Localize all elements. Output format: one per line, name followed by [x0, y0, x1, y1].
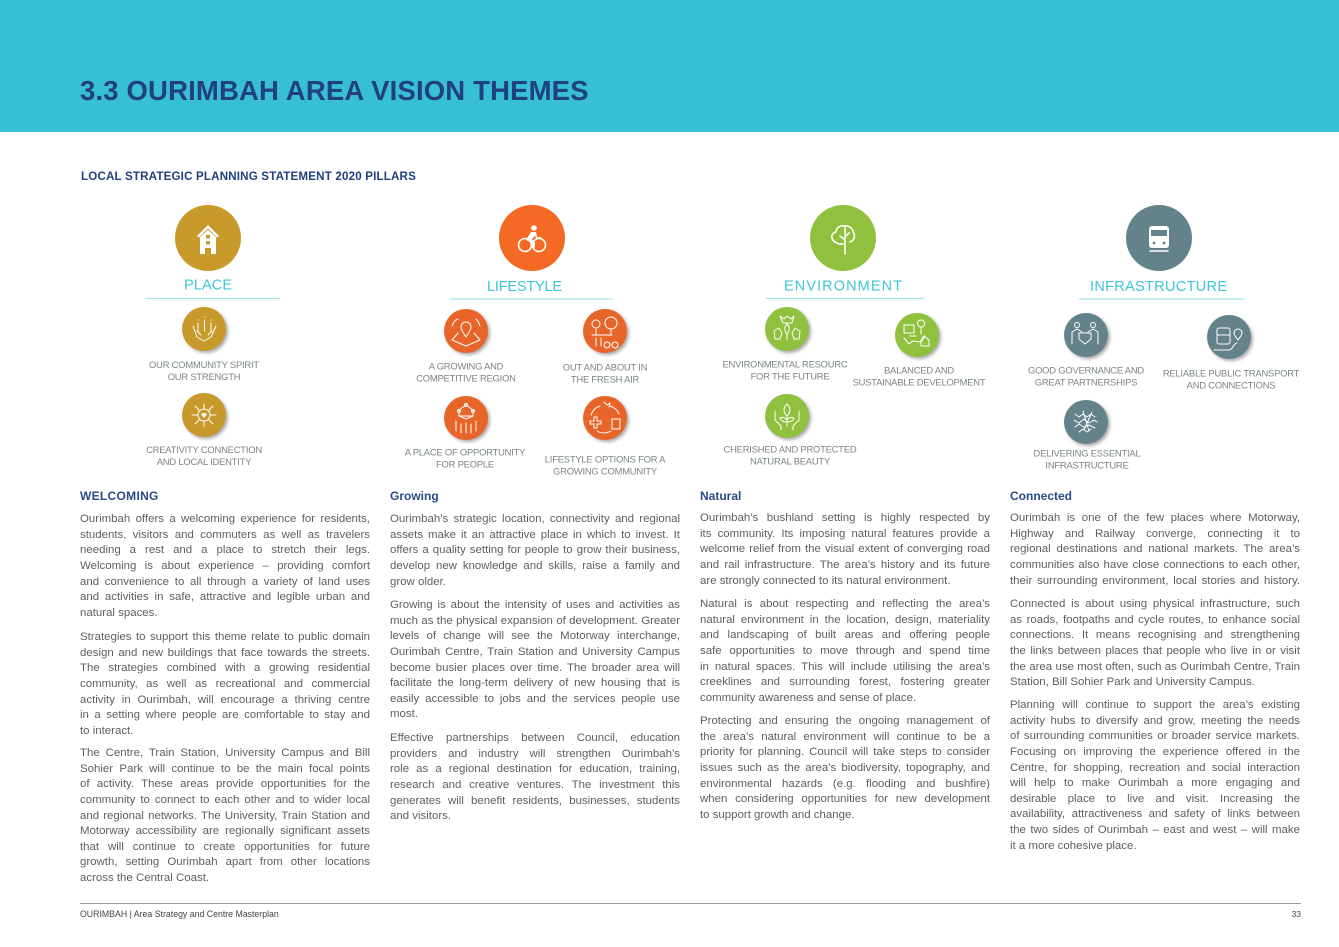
paragraph — [80, 747, 370, 884]
paragraph: in natural spaces. This will include utilising the area’s — [700, 660, 990, 672]
paragraph: to support growth and change. — [700, 809, 855, 821]
paragraph: develop new knowledge and skills, raise a family and — [390, 560, 680, 572]
paragraph: Ourimbah’s bushland setting is highly respected by — [700, 512, 990, 524]
item: environmental resources: ENVIRONMENTAL RESOURC — [723, 358, 848, 370]
paragraph: issues such as the area’s biodiversity, topography, and — [700, 762, 990, 774]
paragraph: natural environment in the location, design, materiality — [700, 614, 990, 626]
paragraph — [700, 598, 990, 704]
paragraph — [80, 513, 370, 619]
icon: train — [1126, 205, 1192, 271]
paragraph: priority for planning. Council will take steps to consider — [700, 746, 990, 758]
paragraph: availability, attractiveness and safety of links between — [1010, 808, 1300, 820]
item: community spirit: OUR COMMUNITY SPIRIT — [149, 359, 259, 370]
pillar heading: lifestyle: LIFESTYLE — [487, 279, 562, 295]
item: community spirit — [149, 307, 259, 382]
paragraph — [390, 599, 680, 720]
section subheading: LOCAL STRATEGIC PLANNING STATEMENT 2020 PILLARS — [81, 170, 416, 183]
page number: 33 — [1291, 909, 1301, 919]
paragraph: environmental hazards (e.g. flooding and bushfire) — [700, 778, 990, 790]
paragraph — [1010, 598, 1300, 688]
paragraph: grow older. — [390, 576, 446, 588]
item: essential infrastructure — [1034, 400, 1140, 470]
paragraph: Ourimbah’s strategic location, connectivity and regional — [390, 513, 680, 525]
column: natural — [700, 489, 990, 821]
item: balanced development: BALANCED AND — [884, 364, 954, 376]
paragraph: providers and industry will strengthen Ourimbah’s — [390, 748, 680, 760]
paragraph: Focusing on improving the experience offered in the — [1010, 746, 1300, 758]
paragraph: community awareness and sense of place. — [700, 692, 916, 704]
paragraph: Strategies to support this theme relate to public domain — [80, 631, 370, 643]
item: cherished beauty: NATURAL BEAUTY — [750, 456, 831, 466]
item: out and about — [563, 309, 647, 384]
item: creativity connection: AND LOCAL IDENTITY — [157, 456, 252, 467]
item: lifestyle options: LIFESTYLE OPTIONS FOR A — [545, 454, 666, 464]
item: good governance: GOOD GOVERNANCE AND — [1028, 364, 1144, 376]
paragraph: Ourimbah Centre, Train Station and University Campus — [390, 646, 680, 658]
paragraph: safe opportunities to move through and spend time — [700, 645, 990, 657]
item: good governance — [1028, 313, 1144, 388]
paragraph — [80, 631, 370, 737]
item: environmental resources: FOR THE FUTURE — [751, 370, 829, 382]
paragraph: facilitate the long-term delivery of new housing that is — [390, 677, 680, 689]
paragraph: and convenience to all through a variety of land uses — [80, 576, 370, 588]
paragraph: welcome relief from the visual extent of converging road — [700, 543, 990, 555]
item: cherished beauty: CHERISHED AND PROTECTED — [724, 444, 857, 454]
paragraph: Protecting and ensuring the ongoing management of — [700, 715, 990, 727]
paragraph: and regional networks. The University, Train Station and — [80, 810, 370, 822]
paragraph — [1010, 699, 1300, 852]
paragraph: Connected is about using physical infrastructure, such — [1010, 598, 1300, 610]
item: lifestyle options: GROWING COMMUNITY — [553, 466, 658, 476]
item: growing region: A GROWING AND — [429, 360, 504, 372]
paragraph: assets make it an attractive place in which to invest. It — [390, 529, 680, 541]
pillar: place — [146, 205, 262, 467]
paragraph: design and new buildings that face towards the streets. — [80, 647, 370, 659]
item: out and about: THE FRESH AIR — [571, 374, 640, 384]
paragraph: it a more cohesive place. — [1010, 840, 1137, 852]
column: connected — [1010, 489, 1300, 852]
pillars diagram — [145, 205, 1300, 476]
paragraph: levels of change will see the Motorway interchange, — [390, 630, 680, 642]
paragraph: as roads, footpaths and cycle routes, to enhance social — [1010, 614, 1300, 626]
pillar heading: place: PLACE — [184, 278, 232, 294]
paragraph: become busier places over time. The broader area will — [390, 662, 680, 674]
pillar heading: environment: ENVIRONMENT — [784, 278, 902, 294]
paragraph: activity hubs to diversify and grow, meeting the needs — [1010, 715, 1300, 727]
icon: tree — [810, 205, 876, 271]
paragraph — [390, 513, 680, 588]
paragraph — [700, 512, 990, 586]
column: growing — [390, 489, 680, 822]
paragraph: of activity. These areas provide opportunities for the — [80, 778, 370, 790]
item: out and about: OUT AND ABOUT IN — [563, 362, 647, 372]
icon: place building — [175, 205, 241, 271]
paragraph: Sohier Park will continue to be the main focal points — [80, 763, 370, 775]
paragraph: across the Central Coast. — [80, 872, 209, 884]
paragraph: will help to make Ourimbah a more engaging and — [1010, 777, 1300, 789]
paragraph: Growing is about the intensity of uses and activities as — [390, 599, 680, 611]
paragraph: and visitors. — [390, 810, 451, 822]
heading: connected: Connected — [1010, 489, 1072, 503]
title: 3.3 OURIMBAH AREA VISION THEMES — [80, 75, 589, 106]
item: public transport — [1163, 315, 1300, 390]
paragraph: Ourimbah offers a welcoming experience for residents, — [80, 513, 370, 525]
paragraph: creeklines and surrounding forest, fostering greater — [700, 676, 990, 688]
paragraph: Centre, for shopping, recreation and social interaction — [1010, 762, 1300, 774]
paragraph: community, as well as recreational and commercial — [80, 678, 370, 690]
pillar heading underlines — [145, 298, 1244, 300]
paragraph: research and creative ventures. The investment this — [390, 779, 680, 791]
paragraph: to interact. — [80, 725, 133, 737]
paragraph: students, visitors and commuters as well as travelers — [80, 529, 370, 541]
item: public transport: RELIABLE PUBLIC TRANSPORT — [1163, 368, 1300, 378]
item: cherished beauty — [724, 394, 857, 466]
item: creativity connection — [146, 393, 262, 467]
paragraph: when considering opportunities for new development — [700, 793, 990, 805]
item: lifestyle options — [545, 396, 666, 476]
header band — [0, 0, 1339, 132]
paragraph: Station, Bill Sohier Park and University Campus. — [1010, 676, 1255, 688]
item: environmental resources — [723, 307, 848, 382]
paragraph: offers a quality setting for people to grow their business, — [390, 544, 680, 556]
paragraph — [700, 715, 990, 821]
paragraph: are strongly connected to its natural environment. — [700, 574, 950, 586]
item: essential infrastructure: DELIVERING ESSENTIAL — [1034, 448, 1140, 458]
footer text: OURIMBAH | Area Strategy and Centre Masterplan — [80, 909, 279, 919]
paragraph: connections. It means recognising and strengthening — [1010, 629, 1300, 641]
item: place of opportunity — [405, 396, 526, 470]
paragraph: desirable place to live and visit. Increasing the — [1010, 793, 1300, 805]
paragraph: in a setting where people are comfortable to stay and — [80, 709, 370, 721]
paragraph — [390, 732, 680, 822]
paragraph: Natural is about respecting and reflecting the area’s — [700, 598, 990, 610]
paragraph: Highway and Railway converge, connecting it to — [1010, 528, 1300, 540]
heading: growing: Growing — [390, 489, 439, 503]
paragraph: much as the physical expansion of development. Greater — [390, 615, 680, 627]
paragraph: the area’s natural environment will continue to be a — [700, 731, 990, 743]
paragraph: and activities in safe, attractive and legible urban and — [80, 591, 370, 603]
paragraph: the links between places that people who live in or visit — [1010, 645, 1300, 657]
pillar: lifestyle — [405, 205, 666, 476]
paragraph: that will continue to create opportunities for future — [80, 841, 370, 853]
heading: natural: Natural — [700, 489, 741, 503]
paragraph — [1010, 512, 1300, 586]
paragraph: Welcoming is about experience – providing comfort — [80, 560, 370, 572]
paragraph: and landscaping of built areas and offering people — [700, 629, 990, 641]
paragraph: of surrounding communities or broader service markets. — [1010, 730, 1300, 742]
item: essential infrastructure: INFRASTRUCTURE — [1045, 460, 1129, 470]
item: public transport: AND CONNECTIONS — [1187, 380, 1275, 390]
pillar: environment — [723, 205, 986, 466]
paragraph: generates will benefit residents, businesses, students — [390, 794, 680, 806]
paragraph: regional destinations and national markets. The area’s — [1010, 543, 1300, 555]
paragraph: its community. Its imposing natural features provide a — [700, 528, 990, 540]
paragraph: their surrounding environment, local stories and history. — [1010, 574, 1300, 586]
item: balanced development: SUSTAINABLE DEVELOPMENT — [853, 376, 986, 388]
paragraph: the two sides of Ourimbah – east and west – will make — [1010, 824, 1300, 836]
column: welcoming — [80, 489, 370, 884]
paragraph: activity in Ourimbah, will encourage a thriving centre — [80, 694, 370, 706]
item: place of opportunity: A PLACE OF OPPORTUNITY — [405, 446, 526, 458]
paragraph: the area use most often, such as Ourimbah Centre, Train — [1010, 660, 1300, 672]
paragraph: growth, setting Ourimbah apart from other locations — [80, 856, 370, 868]
paragraph: Planning will continue to support the area’s existing — [1010, 699, 1300, 711]
paragraph: Effective partnerships between Council, education — [390, 732, 680, 744]
paragraph: The strategies combined with a growing residential — [80, 662, 370, 674]
paragraph: most. — [390, 708, 418, 720]
pillar: infrastructure — [1028, 205, 1300, 470]
item: balanced development — [853, 313, 986, 388]
item: creativity connection: CREATIVITY CONNECTION — [146, 444, 262, 455]
item: community spirit: OUR STRENGTH — [168, 371, 240, 382]
paragraph: role as a regional destination for education, training, — [390, 763, 680, 775]
paragraph: communities also have close connections to each other, — [1010, 559, 1300, 571]
paragraph: Ourimbah is one of the few places where Motorway, — [1010, 512, 1300, 524]
paragraph: The Centre, Train Station, University Campus and Bill — [80, 747, 370, 759]
paragraph: needing a rest and a place to stretch their legs. — [80, 544, 370, 556]
item: growing region — [416, 309, 516, 384]
paragraph: and rail infrastructure. The area’s history and its future — [700, 559, 990, 571]
item: growing region: COMPETITIVE REGION — [416, 372, 516, 384]
paragraph: natural spaces. — [80, 607, 158, 619]
paragraph: community to connect to each other and to wider local — [80, 794, 370, 806]
item: place of opportunity: FOR PEOPLE — [436, 458, 494, 470]
heading: welcoming: WELCOMING — [80, 489, 159, 503]
item: good governance: GREAT PARTNERSHIPS — [1035, 376, 1137, 388]
pillar heading: infrastructure: INFRASTRUCTURE — [1090, 279, 1227, 295]
paragraph: easily accessible to jobs and the services people use — [390, 693, 680, 705]
paragraph: Motorway accessibility are regionally significant assets — [80, 825, 370, 837]
icon: cyclist — [499, 205, 565, 271]
